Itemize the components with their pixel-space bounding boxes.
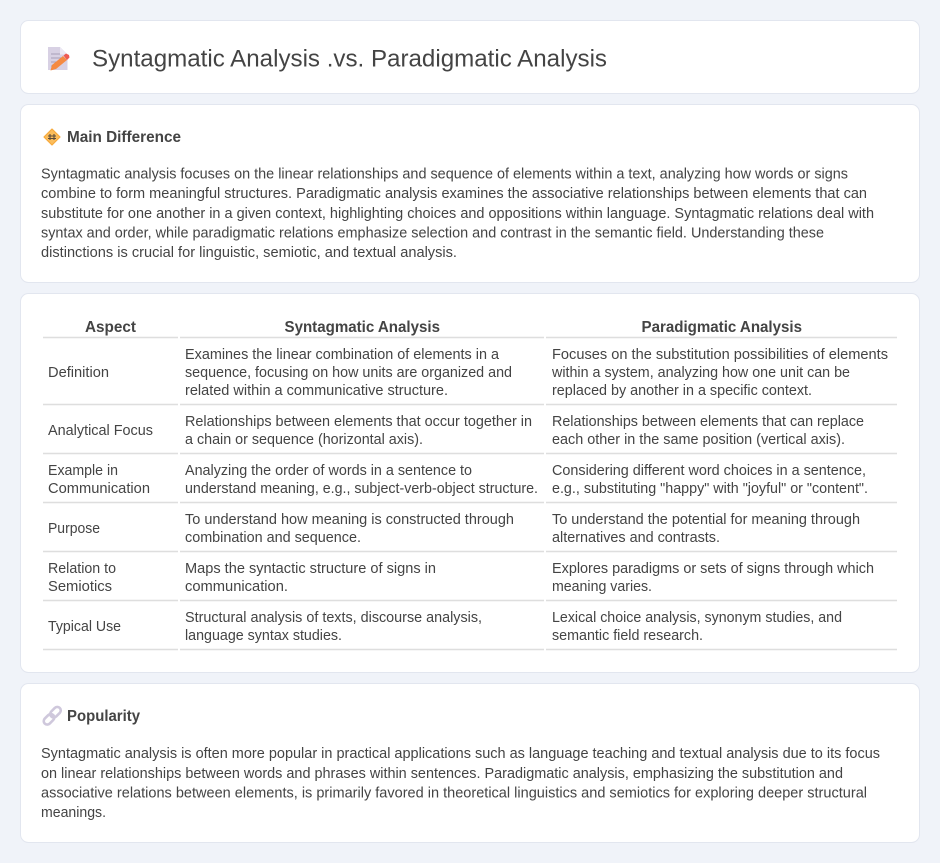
- table row: typical use: Typical Use: [48, 619, 121, 635]
- table row: analytical focus: a chain or sequence (horizontal axis).: [185, 432, 423, 448]
- table row: relation to semiotics: Maps the syntactic structure of signs in: [185, 561, 436, 577]
- table row: relation to semiotics: communication.: [185, 579, 288, 595]
- table row: relation to semiotics: Semiotics: [48, 579, 112, 595]
- text block: main difference paragraph: [41, 166, 874, 261]
- table row: example in communication: Considering different word choices in a sentence,: [552, 463, 866, 479]
- table row: analytical focus: [48, 414, 864, 448]
- table header row: Aspect: [85, 319, 137, 336]
- panel: popularity: [20, 684, 920, 842]
- table row: typical use: language syntax studies.: [185, 628, 342, 644]
- text block: main difference paragraph: combine to form meaningful structures. Paradigmatic analysis examines the associative relationships between elements that can: [41, 186, 867, 202]
- table row: definition: [48, 347, 888, 399]
- table row: example in communication: Example in: [48, 463, 118, 479]
- table row: definition: sequence, focusing on how units are organized and: [185, 365, 512, 381]
- table header row: Syntagmatic Analysis: [284, 319, 440, 336]
- text block: main difference paragraph: distinctions is crucial for linguistic, semiotic, and textual analysis.: [41, 245, 457, 261]
- icon: document with pencil: [48, 47, 70, 70]
- title: Syntagmatic Analysis .vs. Paradigmatic Analysis: [92, 46, 607, 72]
- table row: example in communication: [48, 463, 868, 497]
- table row: example in communication: Communication: [48, 481, 150, 497]
- text block: popularity paragraph: [41, 746, 880, 821]
- text block: main difference paragraph: Syntagmatic analysis focuses on the linear relationships and sequence of elements within a text, analyzing how words or signs: [41, 166, 848, 182]
- table row: relation to semiotics: meaning varies.: [552, 579, 652, 595]
- table row: definition: Definition: [48, 365, 109, 381]
- table row: definition: Examines the linear combination of elements in a: [185, 347, 499, 363]
- text block: popularity paragraph: Syntagmatic analysis is often more popular in practical applications such as language teaching and textual analysis due to its focus: [41, 746, 880, 762]
- table header row: [85, 319, 802, 336]
- heading: main difference: Main Difference: [67, 129, 181, 146]
- table row: purpose: To understand how meaning is constructed through: [185, 512, 514, 528]
- table row: analytical focus: Relationships between elements that can replace: [552, 414, 864, 430]
- table row: typical use: Structural analysis of texts, discourse analysis,: [185, 610, 482, 626]
- table row: definition: related within a communicative structure.: [185, 383, 448, 399]
- table row: definition: replaced by another in a specific context.: [552, 383, 812, 399]
- table header row: Paradigmatic Analysis: [642, 319, 802, 336]
- panel: title header: [20, 20, 920, 94]
- table row: example in communication: understand meaning, e.g., subject-verb-object structure.: [185, 481, 538, 497]
- table row: relation to semiotics: Explores paradigms or sets of signs through which: [552, 561, 874, 577]
- table row: typical use: semantic field research.: [552, 628, 703, 644]
- table row: purpose: [48, 512, 860, 546]
- text block: popularity paragraph: associative relations between elements, is primarily favored in theoretical linguistics and semiotics for exploring deeper structural: [41, 786, 867, 802]
- table row: purpose: Purpose: [48, 521, 100, 537]
- text block: popularity paragraph: meanings.: [41, 805, 106, 821]
- table row: analytical focus: each other in the same position (vertical axis).: [552, 432, 845, 448]
- table row: analytical focus: Analytical Focus: [48, 423, 153, 439]
- table row: typical use: Lexical choice analysis, synonym studies, and: [552, 610, 842, 626]
- text block: main difference paragraph: substitute for one another in a given context, highlighting choices and oppositions within language. Syntagmatic relations deal with: [41, 206, 874, 222]
- table row: definition: Focuses on the substitution possibilities of elements: [552, 347, 888, 363]
- table row: purpose: alternatives and contrasts.: [552, 530, 720, 546]
- text block: popularity paragraph: on linear relationships between words and phrases within sentences. Paradigmatic analysis, emphasizing the substitution and: [41, 766, 843, 782]
- table row: purpose: combination and sequence.: [185, 530, 361, 546]
- table row: relation to semiotics: Relation to: [48, 561, 116, 577]
- table row: definition: within a system, analyzing how one unit can be: [551, 365, 850, 381]
- icon: chain link: [42, 705, 62, 726]
- panel: main difference: [20, 104, 920, 282]
- table row: purpose: To understand the potential for meaning through: [552, 512, 860, 528]
- panel: comparison table: [20, 294, 920, 672]
- table row: analytical focus: Relationships between elements that occur together in: [185, 414, 532, 430]
- table row: typical use: [48, 610, 842, 644]
- heading: popularity: Popularity: [67, 708, 140, 725]
- table row: example in communication: Analyzing the order of words in a sentence to: [185, 463, 472, 479]
- table row: relation to semiotics: [48, 561, 874, 595]
- table row: example in communication: e.g., substituting "happy" with "joyful" or "content".: [552, 481, 868, 497]
- icon: warning diamond: [44, 129, 60, 145]
- text block: main difference paragraph: syntax and order, while paradigmatic relations emphasize selection and contrast in the semantic field. Understanding these: [41, 226, 824, 242]
